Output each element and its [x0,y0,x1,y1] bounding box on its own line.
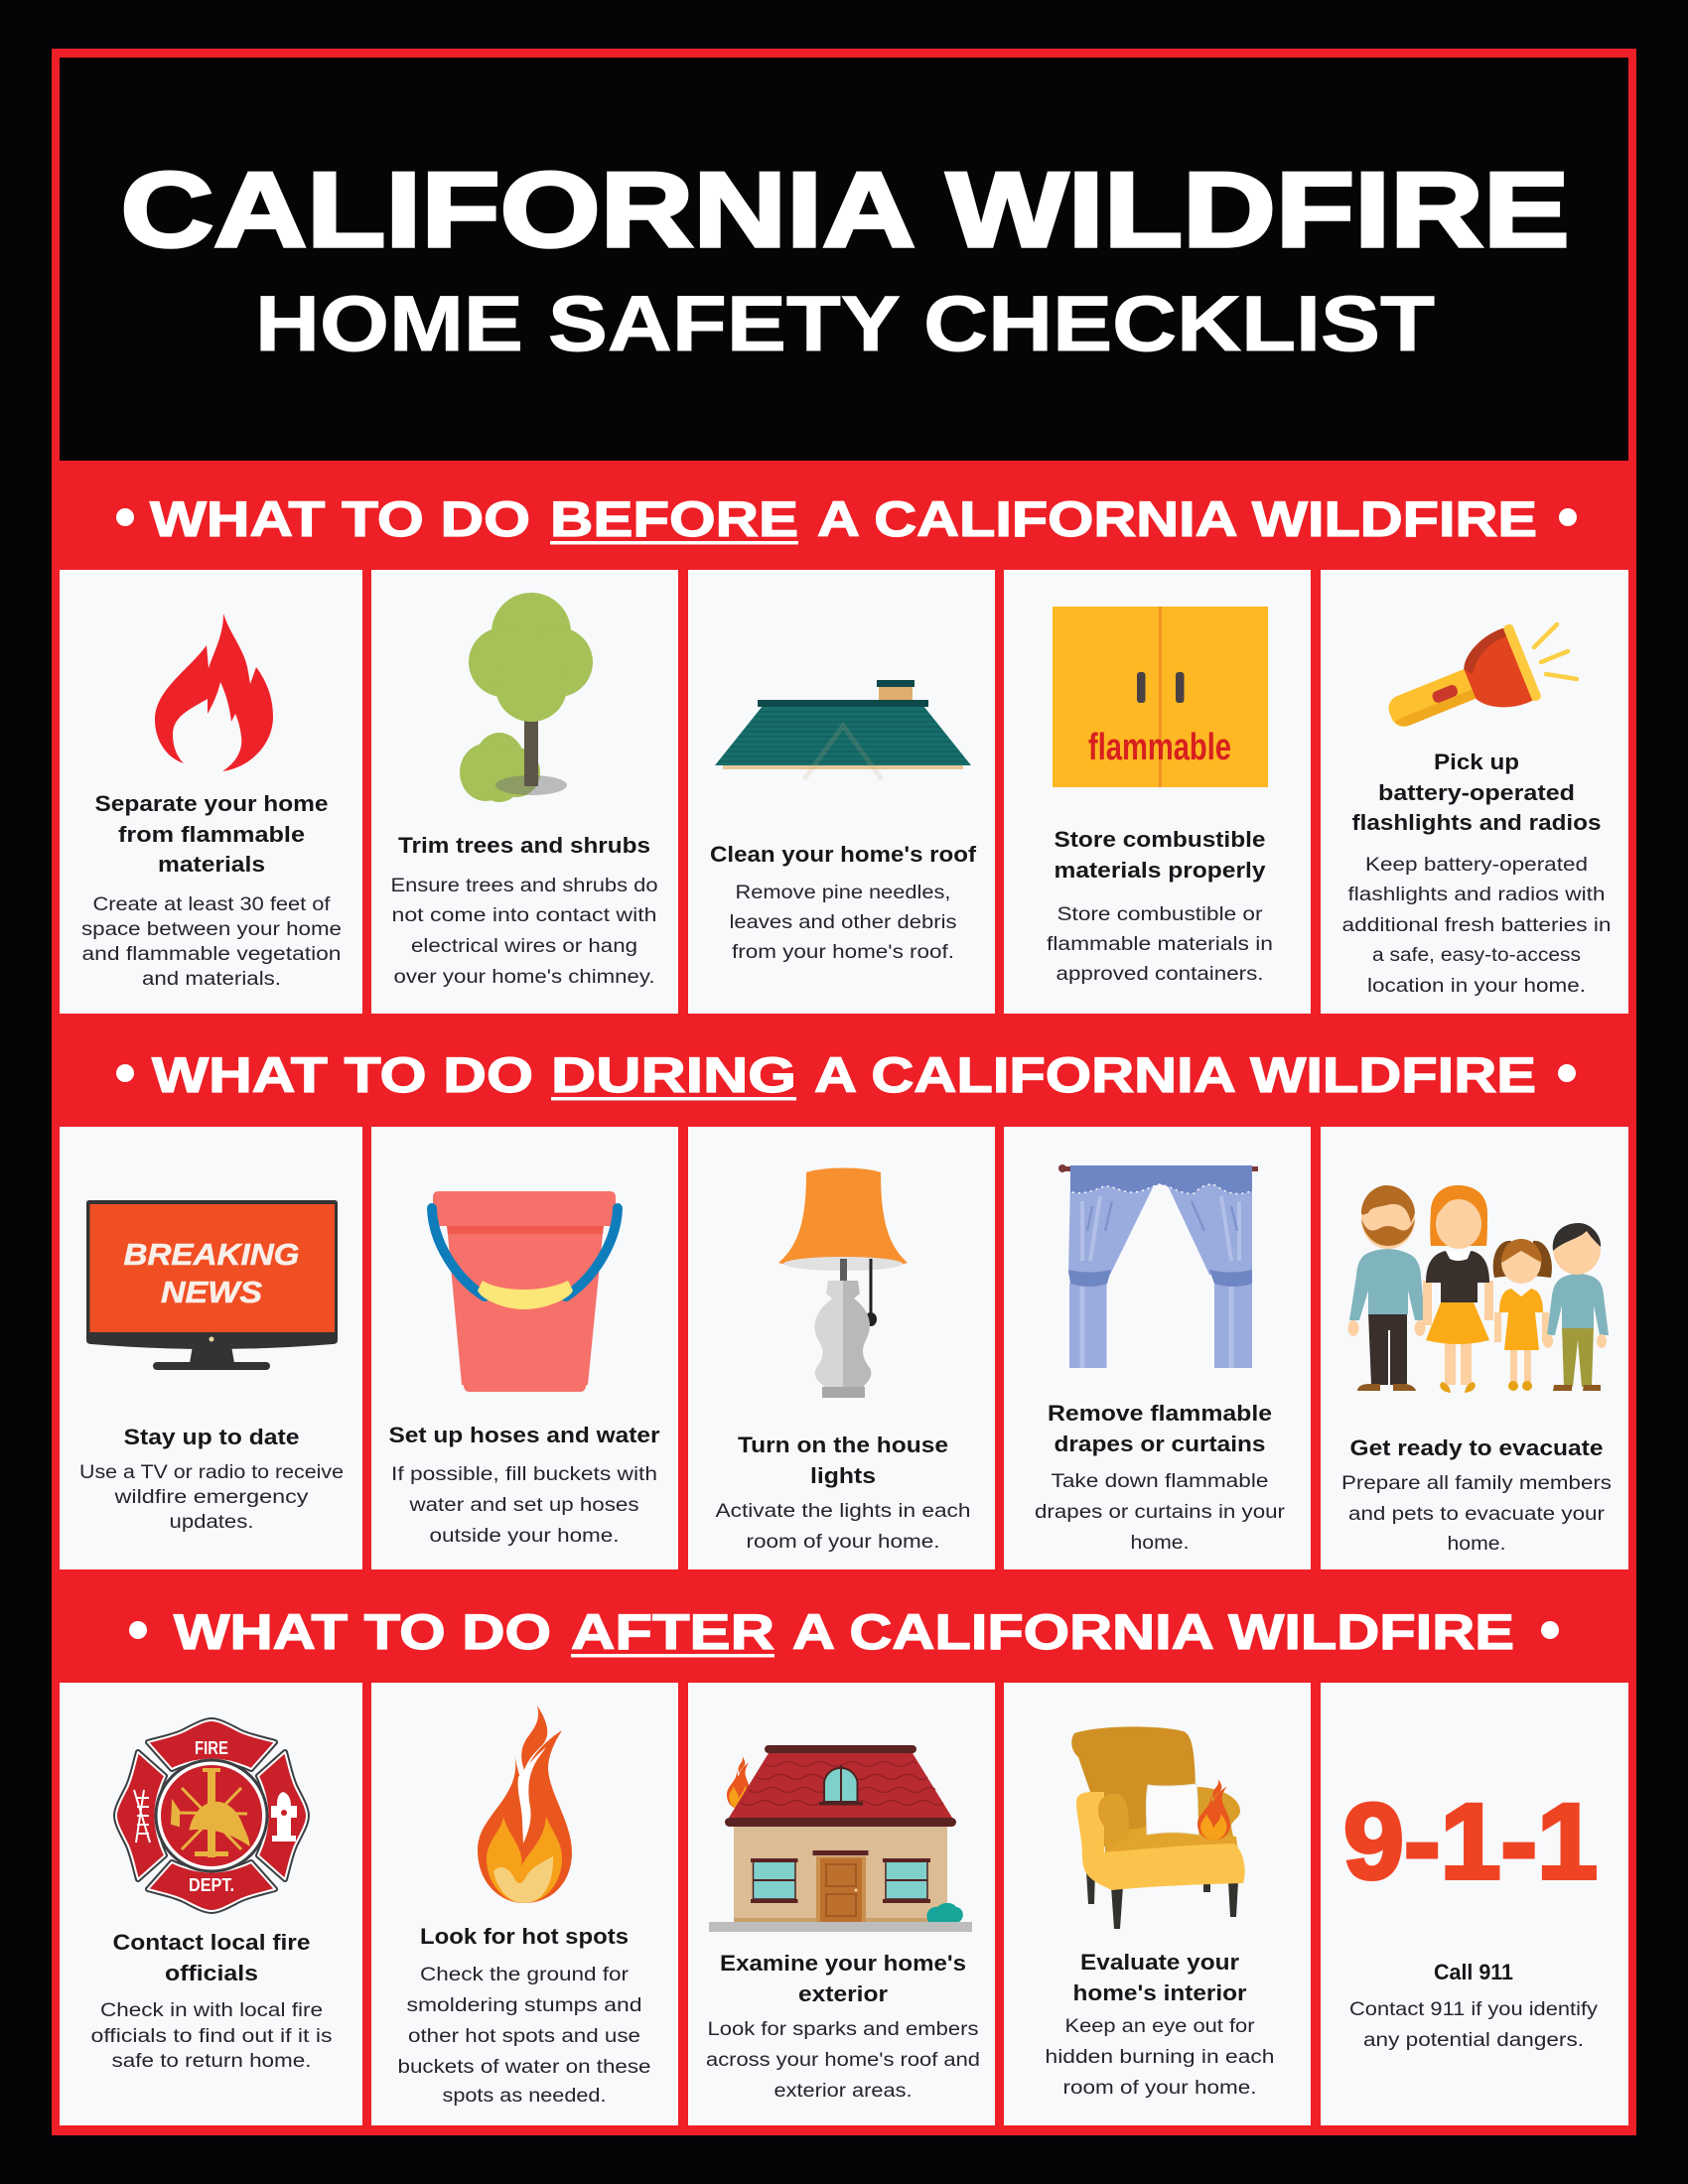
heading: before [116,491,1577,547]
body text: outside your home. [429,1526,620,1547]
icon: flammable cabinet [1053,607,1268,787]
mother [1423,1185,1493,1393]
body text: room of your home. [1062,2078,1257,2099]
panel: separate your home [60,570,362,1014]
icon: orange flame [478,1706,572,1903]
body text: other hot spots and use [408,2026,640,2047]
body text: Create at least 30 feet of [93,894,331,915]
panel: store combustible [1004,570,1311,1014]
body text: Take down flammable [1051,1471,1269,1492]
body text: electrical wires or hang [411,936,637,957]
body text: a safe, easy-to-access [1372,945,1581,966]
title: CALIFORNIA WILDFIRE [121,150,1570,269]
heading: before: WHAT TO DO [150,491,530,547]
father [1348,1185,1426,1391]
panel: local fire officials [60,1683,362,2125]
heading: Separate your home [95,791,328,816]
body text: room of your home. [747,1532,939,1553]
body text: officials to find out if it is [91,2026,332,2047]
heading [1055,827,1266,883]
heading: lights [810,1463,876,1488]
panel: call 911 [1321,1683,1628,2125]
heading: materials [158,852,265,877]
heading: Examine your home's [720,1951,966,1976]
body text: any potential dangers. [1363,2030,1584,2051]
boy [1543,1223,1609,1391]
body text: drapes or curtains in your [1035,1502,1286,1523]
heading [1072,1950,1247,2005]
body text [715,1501,971,1553]
heading: Look for hot spots [420,1924,629,1949]
heading: battery-operated [1378,780,1575,805]
body text: buckets of water on these [397,2057,651,2078]
heading [95,791,328,877]
heading: flashlights and radios [1352,810,1601,835]
body text [1035,1471,1286,1554]
body text [391,1464,657,1547]
body text: Store combustible or [1056,904,1263,925]
heading [738,1433,948,1488]
heading: Remove flammable [1048,1401,1272,1426]
heading: Get ready to evacuate [1350,1435,1603,1460]
icon: tv breaking news: BREAKING [123,1237,300,1272]
heading: from flammable [118,822,305,847]
icon: red flame [155,614,273,771]
body text: additional fresh batteries in [1342,915,1611,936]
panel: ready to evacuate [1321,1127,1628,1570]
icon: lamp [778,1167,908,1398]
icon: tv breaking news: NEWS [161,1275,262,1309]
panel: evaluate interior [1004,1683,1311,2125]
heading [113,1930,310,1985]
heading [1352,750,1601,835]
subtitle: HOME SAFETY CHECKLIST [255,279,1435,367]
heading [1048,1401,1272,1456]
body text: Check the ground for [420,1965,630,1985]
girl [1493,1239,1552,1391]
body text: across your home's roof and [706,2050,980,2071]
heading: before: BEFORE [550,491,798,547]
body text [1342,855,1611,997]
heading: after: AFTER [571,1604,774,1660]
heading: officials [165,1961,258,1985]
panel: trim trees [371,570,678,1014]
heading [720,1951,966,2006]
panel: remove drapes [1004,1127,1311,1570]
icon: roof [715,680,971,779]
heading: Call 911 [1434,1960,1513,1984]
body text: approved containers. [1056,964,1263,985]
heading: after: A CALIFORNIA WILDFIRE [792,1604,1514,1660]
body text [1047,904,1273,985]
body text: smoldering stumps and [407,1995,641,2016]
panel: hot spots [371,1683,678,2125]
panel: stay up to date [60,1127,362,1570]
heading: during: WHAT TO DO [152,1047,533,1103]
icon: bucket [432,1191,618,1392]
body text: and pets to evacuate your [1348,1504,1606,1525]
body text: from your home's roof. [732,942,954,963]
heading: Trim trees and shrubs [398,833,650,858]
heading: Contact local fire [113,1930,310,1955]
body text [1045,2016,1275,2099]
heading: after [129,1604,1559,1660]
panel: pick up flashlights [1321,570,1628,1014]
body text [391,876,657,988]
heading: after: WHAT TO DO [174,1604,551,1660]
icon: armchair with flame [1071,1726,1245,1929]
body text: Remove pine needles, [735,883,951,903]
panel: clean roof [688,570,995,1014]
body text: spots as needed. [443,2086,606,2107]
body text: Keep battery-operated [1365,855,1588,876]
body text: Look for sparks and embers [707,2019,979,2040]
body text [706,2019,980,2102]
body text: Activate the lights in each [715,1501,971,1522]
icon: flashlight [1375,623,1577,753]
body text: water and set up hoses [408,1495,639,1516]
heading: Turn on the house [738,1433,948,1457]
body text: over your home's chimney. [393,967,655,988]
body text: Contact 911 if you identify [1349,1999,1599,2020]
icon: tree and shrub [460,593,593,802]
body text: not come into contact with [391,905,657,926]
icon: family [1348,1185,1609,1393]
body text: updates. [169,1512,254,1533]
body text [81,894,342,990]
body text [79,1462,344,1533]
body text [91,2000,332,2072]
body text: home. [1130,1533,1190,1554]
heading: Store combustible [1055,827,1265,852]
heading: during: A CALIFORNIA WILDFIRE [814,1047,1536,1103]
panel: examine exterior [688,1683,995,2125]
body text: Check in with local fire [100,2000,323,2021]
body text: location in your home. [1367,976,1586,997]
body text: Keep an eye out for [1064,2016,1255,2037]
body text: home. [1448,1534,1505,1555]
heading: before: A CALIFORNIA WILDFIRE [817,491,1537,547]
body text: Ensure trees and shrubs do [391,876,657,896]
body text: space between your home [81,919,342,940]
body text: wildfire emergency [113,1487,309,1508]
body text: flammable materials in [1047,934,1273,955]
body text: If possible, fill buckets with [391,1464,657,1485]
body text: and materials. [142,969,281,990]
body text: flashlights and radios with [1348,885,1605,905]
icon: fire department badge: FIRE [195,1738,228,1758]
body text [397,1965,651,2107]
big number 9-1-1: 9-1-1 [1343,1781,1598,1901]
body text [729,883,957,963]
heading: home's interior [1072,1980,1247,2005]
icon: tv breaking news [86,1200,338,1370]
panel: hoses and water [371,1127,678,1570]
heading: exterior [798,1981,888,2006]
body text [1341,1473,1612,1555]
body text: exterior areas. [774,2081,912,2102]
heading: Evaluate your [1080,1950,1239,1975]
body text: hidden burning in each [1045,2047,1275,2068]
heading: during: DURING [551,1047,796,1103]
body text: leaves and other debris [729,912,957,933]
heading: materials properly [1055,858,1266,883]
icon: fire department badge: DEPT. [189,1875,234,1895]
heading: drapes or curtains [1055,1432,1265,1456]
header panel [60,58,1628,461]
icon: flammable cabinet: flammable [1088,727,1231,768]
heading: Clean your home's roof [710,842,977,867]
body text: safe to return home. [111,2051,312,2072]
icon: house with flame [709,1745,972,1932]
panel: house lights [688,1127,995,1570]
body text: Use a TV or radio to receive [79,1462,344,1483]
heading: Pick up [1434,750,1519,774]
heading: during [116,1047,1576,1103]
heading: Stay up to date [123,1425,300,1449]
icon: fire department badge [116,1720,307,1911]
body text: Prepare all family members [1341,1473,1612,1494]
icon: curtains [1058,1164,1258,1368]
body text [1349,1999,1599,2051]
body text: and flammable vegetation [81,944,342,965]
heading: Set up hoses and water [389,1423,660,1447]
